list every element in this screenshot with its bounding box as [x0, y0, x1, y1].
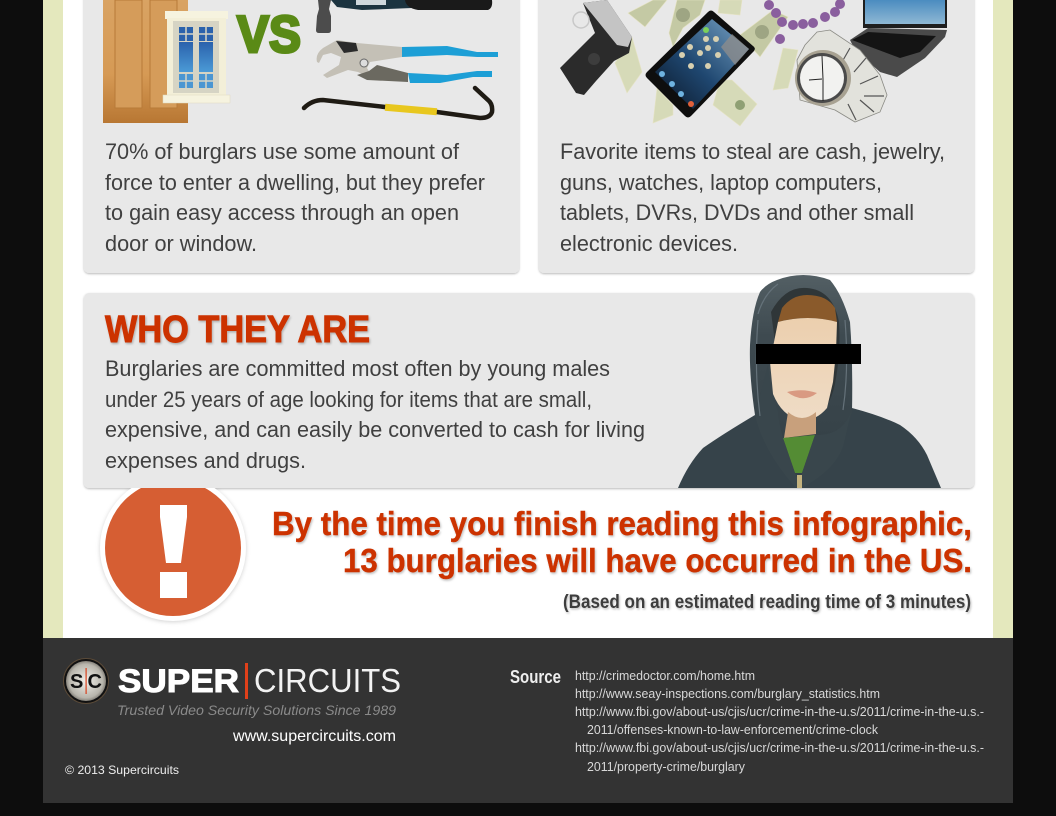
logo: Super Circuits	[64, 658, 401, 704]
icon: hammer	[316, 0, 492, 33]
website: www.supercircuits.com	[232, 728, 396, 745]
callout: burglary statistic: By the time you finish reading this infographic,	[272, 505, 972, 542]
icon: wooden door	[103, 0, 188, 123]
callout: burglary statistic	[272, 505, 972, 613]
source list: http://www.fbi.gov/about-us/cjis/ucr/crime-in-the-u.s/2011/crime-in-the-u.s.-	[575, 704, 984, 719]
text block: items: electronic devices.	[560, 231, 738, 256]
photo: hooded young man	[678, 275, 941, 488]
icon: wristwatch	[795, 30, 887, 122]
text block: items: Favorite items to steal are cash, jewelry,	[560, 139, 945, 164]
source list: 2011/offenses-known-to-law-enforcement/crime-clock	[587, 722, 878, 737]
text block: force: 70% of burglars use some amount of	[105, 139, 460, 164]
logo: Super Circuits: CIRCUITS	[254, 662, 401, 699]
icon: tablet	[646, 10, 755, 118]
text block: who they are: expensive, and can easily be converted to cash for living	[105, 417, 645, 442]
source list: http://www.seay-inspections.com/burglary_statistics.htm	[575, 686, 880, 701]
censor bar	[756, 344, 861, 364]
panel: how they enter	[84, 0, 519, 273]
icon: bracelet	[764, 0, 845, 44]
icon: handgun	[560, 0, 632, 95]
panel: what they steal	[539, 0, 974, 273]
text block: force	[105, 139, 485, 256]
icon: crowbar	[304, 88, 492, 118]
text block: force: to gain easy access through an open	[105, 200, 459, 225]
callout note: (Based on an estimated reading time of 3 minutes)	[563, 592, 971, 613]
source list: 2011/property-crime/burglary	[587, 759, 745, 774]
vs label: VS	[237, 6, 301, 64]
logo badge	[64, 658, 108, 704]
text block: items: tablets, DVRs, DVDs and other small	[560, 200, 914, 225]
copyright: © 2013 Supercircuits	[65, 763, 179, 777]
white content area	[63, 0, 993, 640]
text block: items	[560, 139, 945, 256]
icon: laptop	[850, 0, 947, 77]
text block: items: guns, watches, laptop computers,	[560, 170, 882, 195]
tagline: Trusted Video Security Solutions Since 1989	[117, 702, 396, 718]
text block: who they are: expenses and drugs.	[105, 448, 306, 473]
source list	[575, 668, 984, 774]
callout: burglary statistic: 13 burglaries will have occurred in the US.	[343, 542, 972, 579]
source list: http://www.fbi.gov/about-us/cjis/ucr/crime-in-the-u.s/2011/crime-in-the-u.s.-	[575, 740, 984, 755]
crowbar label	[385, 104, 437, 115]
icon: pliers	[317, 40, 498, 83]
source heading: Source	[510, 667, 561, 687]
text block: who they are: under 25 years of age looking for items that are small,	[105, 387, 592, 412]
logo badge: SC	[70, 671, 102, 693]
source list: http://crimedoctor.com/home.htm	[575, 668, 755, 683]
icon: money bills	[615, 0, 798, 126]
cream page border	[43, 0, 1013, 640]
icon: window	[163, 11, 230, 103]
heading: who they are: WHO THEY ARE	[105, 309, 370, 351]
logo: Super Circuits: SUPER	[118, 663, 239, 699]
text block: who they are: Burglaries are committed most often by young males	[105, 356, 610, 381]
text block: force: force to enter a dwelling, but they prefer	[105, 170, 485, 195]
panel: who they are	[84, 275, 974, 488]
panel: footer	[43, 638, 1013, 803]
icon: exclamation badge	[100, 475, 246, 621]
text block: force: door or window.	[105, 231, 257, 256]
text block: who they are	[105, 356, 645, 473]
